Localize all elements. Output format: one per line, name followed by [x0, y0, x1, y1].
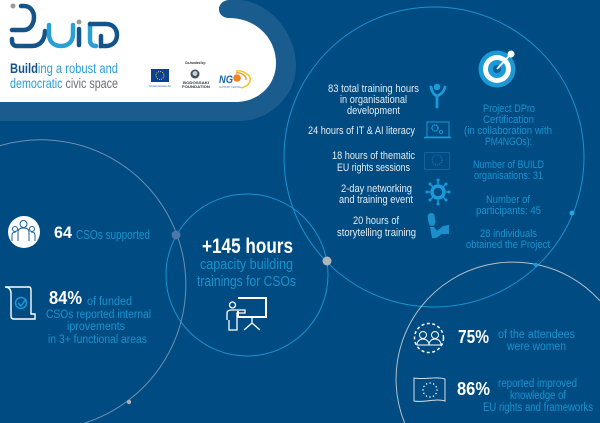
stat: 84% of funded CSOs: 84%	[49, 288, 82, 308]
tagline	[10, 60, 118, 91]
icon: scroll with check	[5, 287, 35, 319]
header panel: white	[0, 0, 276, 102]
text block: training hours list: 24 hours of IT & AI literacy	[308, 125, 415, 137]
icon: person raising arms	[431, 84, 445, 107]
icon: presenter at board	[227, 298, 266, 330]
icon: microphone and hand	[427, 213, 449, 238]
text block: Project DPro certification: PM4NGOs):	[485, 136, 532, 148]
text block: training hours list: 2-day networking	[341, 183, 412, 195]
stat: 75% attendees women: 75%	[458, 327, 489, 347]
node dots	[127, 210, 575, 404]
text block: Project DPro certification: Number of BUILD	[473, 159, 544, 171]
text block: Project DPro certification: obtained the Project	[466, 239, 550, 251]
text block: training hours list: 20 hours of	[353, 215, 400, 227]
logo: Bodossaki Foundation	[182, 61, 210, 89]
circle: large right	[284, 7, 584, 307]
stat: 84% of funded CSOs: in 3+ functional areas	[48, 334, 147, 346]
stat: 84% of funded CSOs	[46, 288, 151, 346]
stat: 86% improved knowledge: 86%	[457, 379, 490, 399]
circle: center	[166, 194, 328, 356]
stat: 84% of funded CSOs: iprovements	[67, 321, 125, 333]
text block: training hours list: storytelling training	[337, 227, 416, 239]
circle: bottom right	[396, 262, 600, 423]
text block: Project DPro certification: 28 individuals	[480, 228, 537, 240]
icon: women in circle	[414, 324, 444, 352]
stat: 86% improved knowledge: knowledge of	[510, 390, 567, 402]
logo: Bodossaki Foundation: FOUNDATION	[182, 84, 210, 89]
logo: Bodossaki Foundation: BODOSSAKI	[183, 80, 209, 85]
text: Co-funded by the European Union	[149, 84, 171, 88]
text block: training hours list	[308, 83, 419, 239]
logo: NGO Support Centre: SUPPORT CENTRE	[219, 85, 241, 89]
header band: lighter crescent	[0, 0, 296, 121]
text block: training hours list: and training event	[339, 194, 413, 206]
icon: target with dart	[478, 50, 516, 88]
text block: Project DPro certification: (in collaboration with	[464, 125, 552, 137]
tagline: democratic civic space	[10, 75, 118, 91]
heading: +145 hours	[197, 235, 296, 290]
text block: training hours list: development	[347, 105, 400, 117]
icon: people in white circle	[8, 216, 40, 248]
text block: Project DPro certification: Certification	[483, 114, 534, 126]
stat: 75% attendees women: of the attendees	[498, 329, 575, 341]
text block: Project DPro certification: organisations: 31	[474, 170, 543, 182]
icon: network gear	[426, 178, 450, 206]
stat: 75% attendees women: were women	[506, 341, 566, 353]
text block: Project DPro certification: participants: 45	[476, 205, 541, 217]
icon: laptop with gears	[424, 122, 451, 138]
stat: 64 CSOs supported	[54, 223, 150, 242]
icon: EU flag white outline	[414, 378, 445, 401]
text block: Project DPro certification: Project DPro	[483, 103, 535, 115]
stat: 64 CSOs supported: 64	[54, 223, 73, 242]
text block: Project DPro certification	[464, 103, 552, 251]
text block: training hours list: 18 hours of thematic	[332, 150, 415, 162]
stat: 84% of funded CSOs: of funded	[87, 296, 132, 308]
text block: training hours list: EU rights sessions	[337, 162, 410, 174]
stat: 86% improved knowledge	[457, 378, 593, 414]
stat: 64 CSOs supported: CSOs supported	[76, 228, 150, 242]
heading: +145 hours: trainings for CSOs	[197, 274, 296, 290]
text block: Project DPro certification: Number of	[486, 194, 531, 206]
tagline: Building a robust and	[10, 60, 118, 76]
circle: left grey	[0, 140, 186, 423]
text block: training hours list: 83 total training hours	[328, 83, 419, 95]
logo: NGO Support Centre	[219, 71, 250, 89]
logo: NGO Support Centre: NG	[219, 74, 233, 86]
text block: training hours list: in organisational	[340, 94, 407, 106]
stat: 75% attendees women	[458, 327, 575, 353]
heading: +145 hours: capacity building	[200, 257, 293, 273]
logo: Bodossaki Foundation: Co-funded by:	[185, 61, 206, 65]
stat: 86% improved knowledge: reported improved	[498, 378, 577, 390]
icon: EU flag outline	[424, 152, 450, 170]
logo: BUILD	[10, 4, 117, 46]
stat: 84% of funded CSOs: CSOs reported internal	[46, 309, 151, 321]
logo: EU co-funded	[149, 69, 171, 88]
heading: +145 hours: +145 hours	[202, 235, 293, 258]
